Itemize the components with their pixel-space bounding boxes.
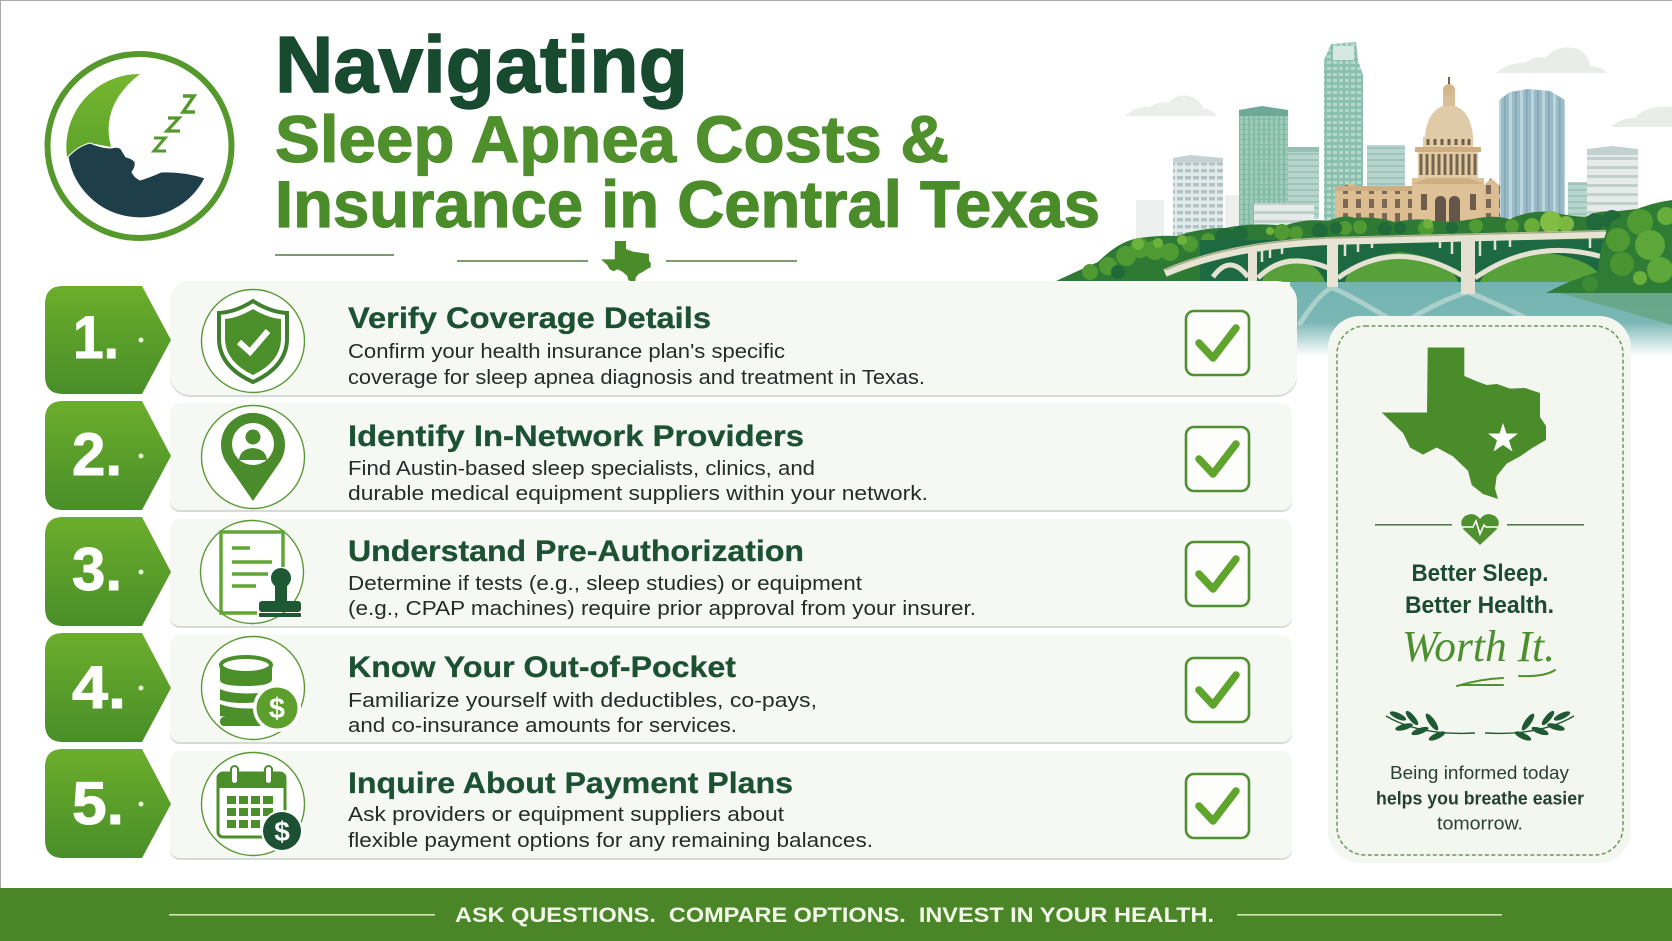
panel: Better Sleep sidebar: helps you breathe easier: [1376, 788, 1584, 808]
icon: coin stack with dollar: [220, 657, 301, 732]
footer banner: [0, 888, 1672, 941]
footer banner: ASK QUESTIONS. COMPARE OPTIONS. INVEST IN YOUR HEALTH.: [455, 904, 1214, 927]
trees in front, right bank: [1546, 200, 1672, 293]
step 4 row: Know Your Out-of-Pocket: [348, 651, 736, 684]
step 3 row: Determine if tests (e.g., sleep studies) or equipment: [348, 572, 862, 595]
step 4 row: Familiarize yourself with deductibles, co-pays,: [348, 689, 817, 712]
title: Sleep Apnea Costs &: [275, 102, 949, 176]
step 5 row: Inquire About Payment Plans: [348, 767, 793, 800]
map: Texas with star: [1382, 348, 1546, 499]
panel: Better Sleep sidebar: Better Sleep.: [1412, 560, 1548, 587]
panel: Better Sleep sidebar: Being informed today: [1390, 762, 1570, 783]
step 3 row: (e.g., CPAP machines) require prior approval from your insurer.: [348, 597, 976, 620]
divider with heart: [1375, 514, 1584, 545]
icon: location pin with doctor: [221, 413, 285, 501]
step 1 row: [45, 281, 1297, 397]
icon: shield: [219, 301, 287, 382]
icon: coin stack with dollar: $: [269, 693, 285, 725]
step 3 row: [45, 517, 1292, 628]
step 1 row: 1.: [73, 304, 119, 371]
step 5 row: Ask providers or equipment suppliers about: [348, 803, 784, 826]
step 2 row: Find Austin-based sleep specialists, clinics, and: [348, 457, 815, 480]
step 1 row: Confirm your health insurance plan's specific: [348, 340, 785, 363]
step 4 row: [45, 633, 1292, 744]
step 3 row: Understand Pre-Authorization: [348, 535, 804, 568]
title: Insurance in Central Texas: [275, 167, 1100, 241]
step 3 row: 3.: [72, 536, 122, 603]
panel: Better Sleep sidebar: Better Health.: [1405, 592, 1554, 619]
logo: sleeping face in circle: [48, 54, 232, 238]
step 1 row: Verify Coverage Details: [348, 302, 711, 335]
Austin skyline: [1136, 42, 1638, 240]
underline flourish: [1457, 670, 1555, 686]
step 5 row: [45, 749, 1292, 860]
icon: document with stamp: [221, 532, 301, 617]
clouds: [1125, 47, 1672, 127]
panel: Better Sleep sidebar: tomorrow.: [1437, 812, 1523, 834]
icon: calendar with dollar: [218, 766, 303, 852]
step 4 row: and co-insurance amounts for services.: [348, 714, 737, 737]
step 2 row: Identify In-Network Providers: [348, 420, 804, 453]
step 2 row: [45, 401, 1292, 512]
step 1 row: coverage for sleep apnea diagnosis and treatment in Texas.: [348, 366, 925, 389]
laurel branches: [1386, 709, 1574, 743]
step 5 row: 5.: [72, 770, 124, 837]
panel: Better Sleep sidebar: [1328, 316, 1631, 863]
step 5 row: flexible payment options for any remaining balances.: [348, 829, 873, 852]
Congress Avenue bridge: [1165, 231, 1610, 294]
trees behind bridge: [1054, 205, 1672, 282]
icon: calendar with dollar: $: [274, 816, 290, 847]
title: Navigating: [275, 20, 688, 109]
step 4 row: 4.: [72, 654, 126, 721]
title: [275, 20, 1100, 241]
step 2 row: 2.: [72, 421, 122, 488]
panel: Better Sleep sidebar: Worth It.: [1402, 622, 1555, 671]
river: [1290, 280, 1672, 356]
Texas State Capitol: [1335, 77, 1500, 234]
step 2 row: durable medical equipment suppliers within your network.: [348, 482, 928, 505]
title divider with Texas icon: [275, 241, 797, 284]
